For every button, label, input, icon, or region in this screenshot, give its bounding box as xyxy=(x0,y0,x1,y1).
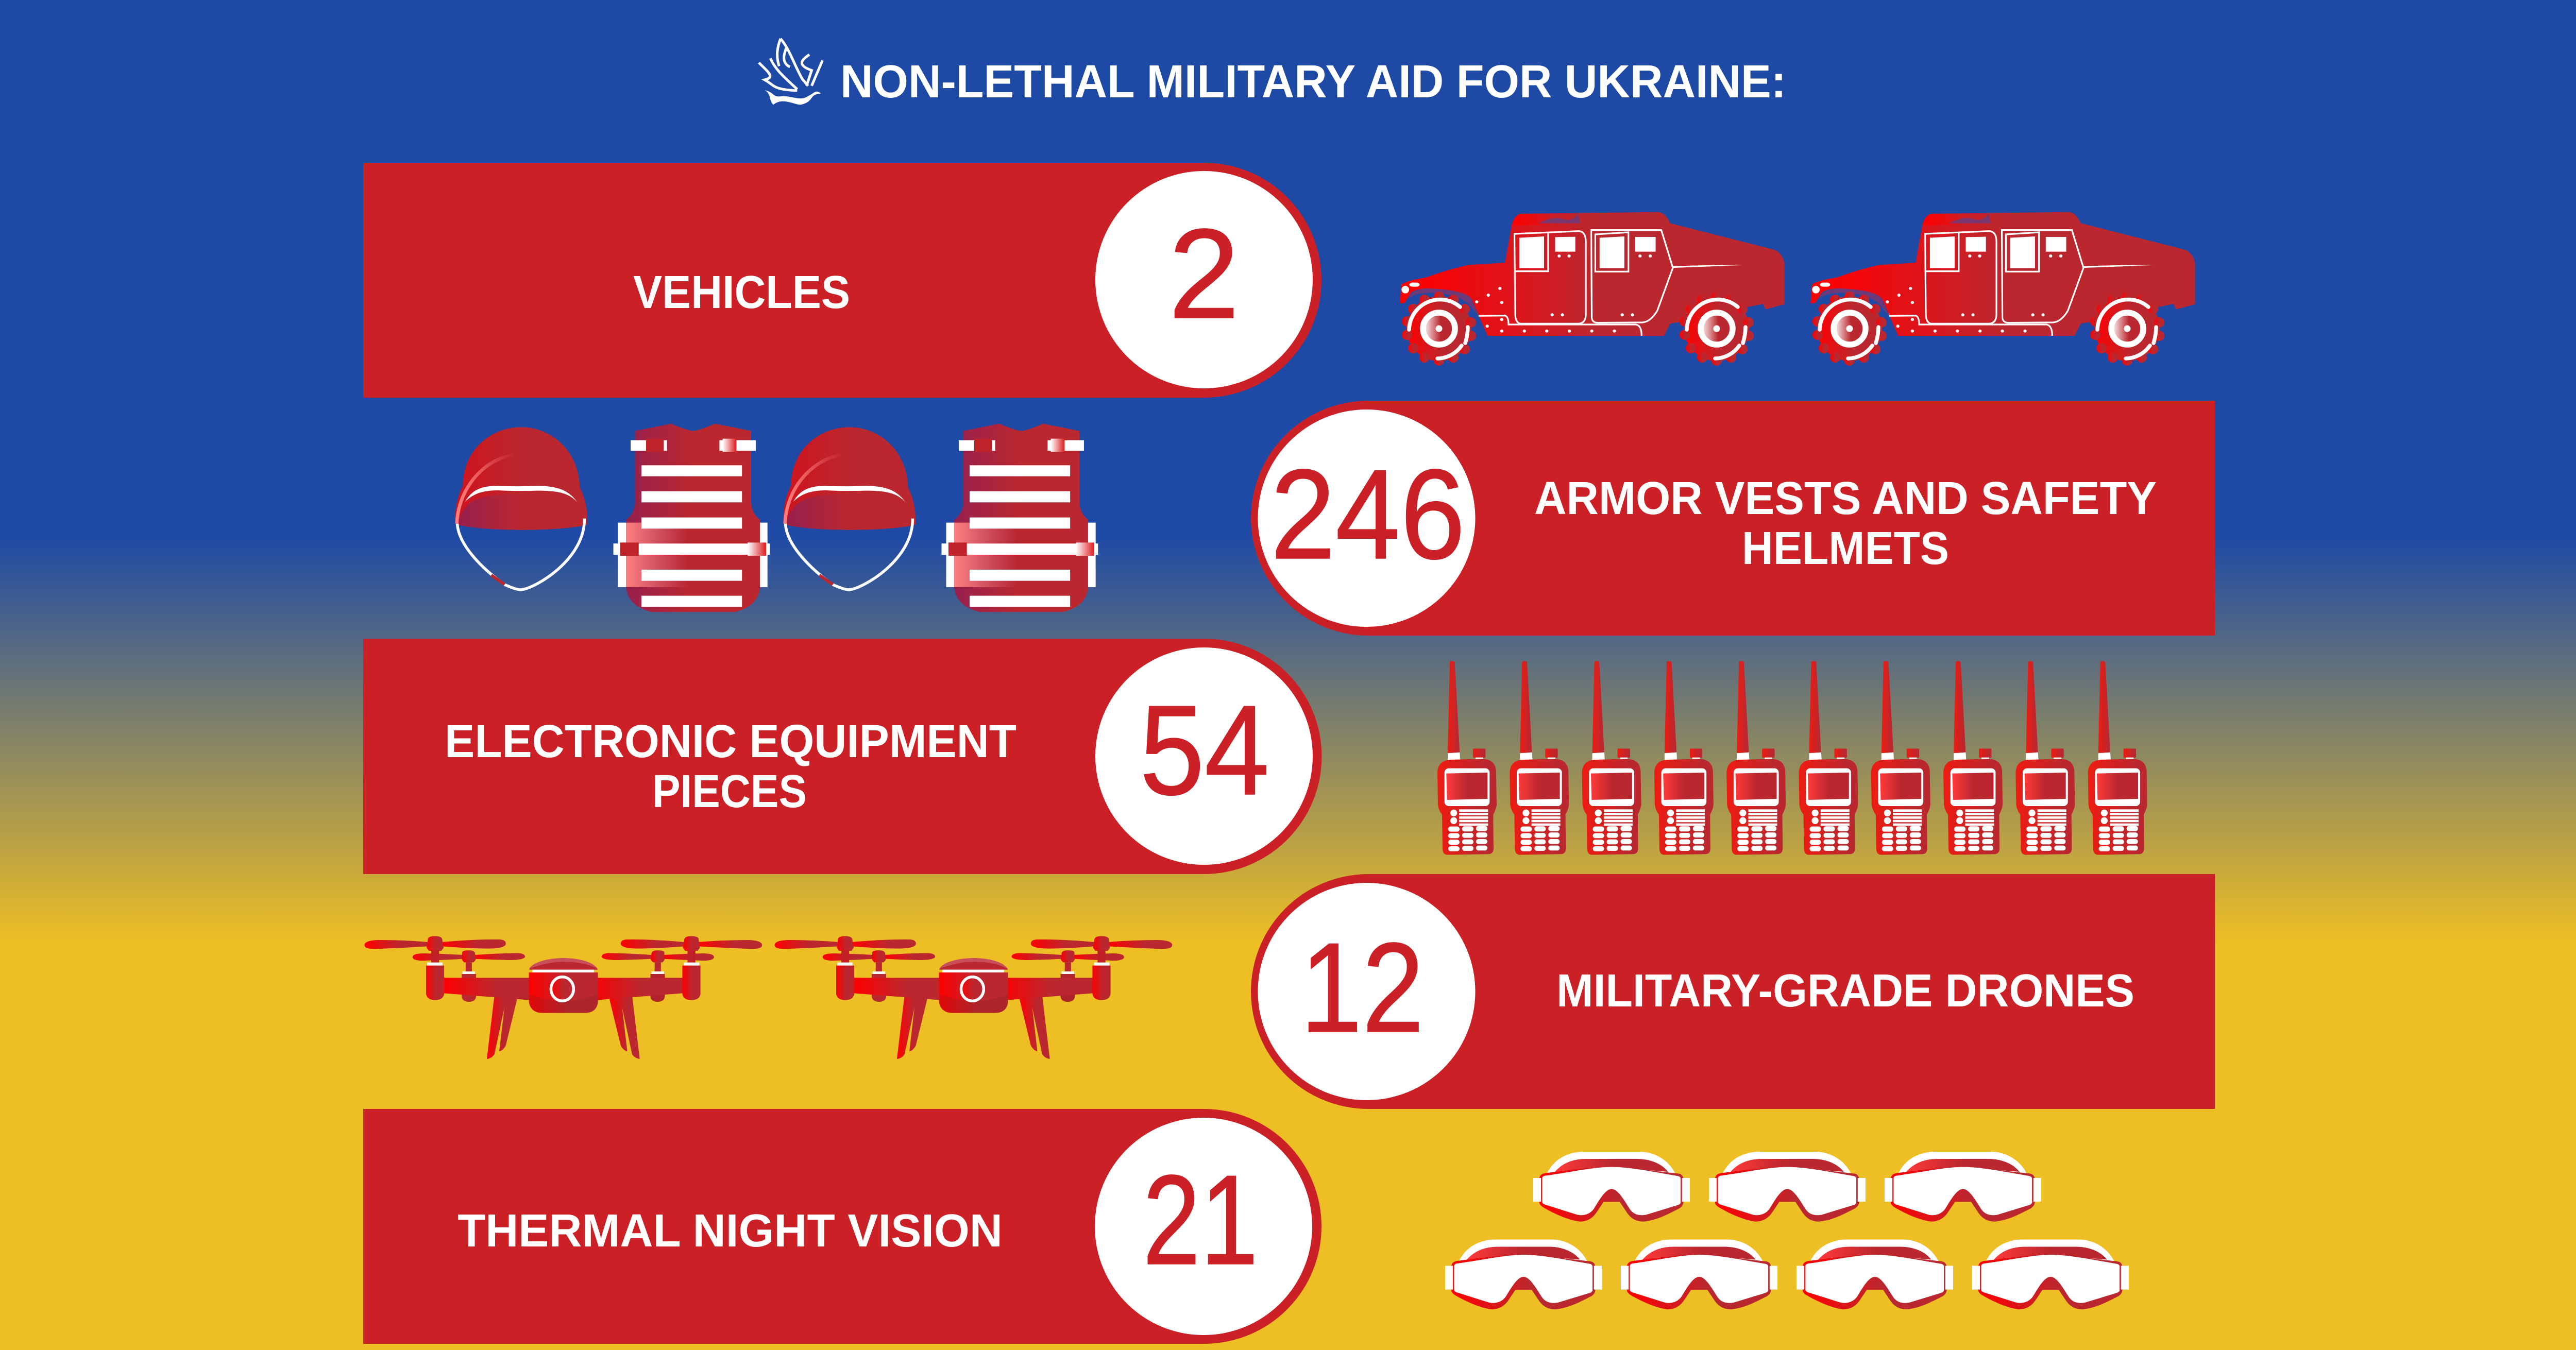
number: 246: 246 xyxy=(1270,442,1465,586)
panel: vehicles xyxy=(363,163,1321,398)
icon: dove and leaf logo xyxy=(759,39,822,105)
label: vehicles: VEHICLES xyxy=(633,267,850,318)
label: armor vests and safety helmets: ARMOR VESTS AND SAFETY xyxy=(1534,473,2157,524)
icons: ten radios xyxy=(1437,661,2147,855)
title: NON-LETHAL MILITARY AID FOR UKRAINE: xyxy=(840,56,1786,108)
panel: thermal night vision xyxy=(363,1109,1321,1344)
label: armor vests and safety helmets: HELMETS xyxy=(1742,523,1949,574)
panel: drones xyxy=(1251,874,2215,1109)
number: 12: 12 xyxy=(1300,916,1424,1059)
panel: armor vests and helmets xyxy=(1251,401,2215,636)
icons: two drones xyxy=(364,936,1172,1059)
icons: seven goggles xyxy=(1445,1152,2129,1309)
label: electronic equipment pieces: PIECES xyxy=(652,766,807,817)
icons: two humvees xyxy=(1400,212,2195,366)
number: 54: 54 xyxy=(1140,678,1269,822)
panel: electronic equipment xyxy=(363,639,1322,874)
label: thermal night vision: THERMAL NIGHT VISION xyxy=(457,1205,1003,1257)
label: military-grade drones: MILITARY-GRADE DRONES xyxy=(1556,965,2134,1017)
number: 21: 21 xyxy=(1143,1148,1258,1291)
label: electronic equipment pieces: ELECTRONIC EQUIPMENT xyxy=(445,716,1016,767)
icons: helmets and vests xyxy=(455,424,1098,612)
number: 2: 2 xyxy=(1168,202,1240,345)
